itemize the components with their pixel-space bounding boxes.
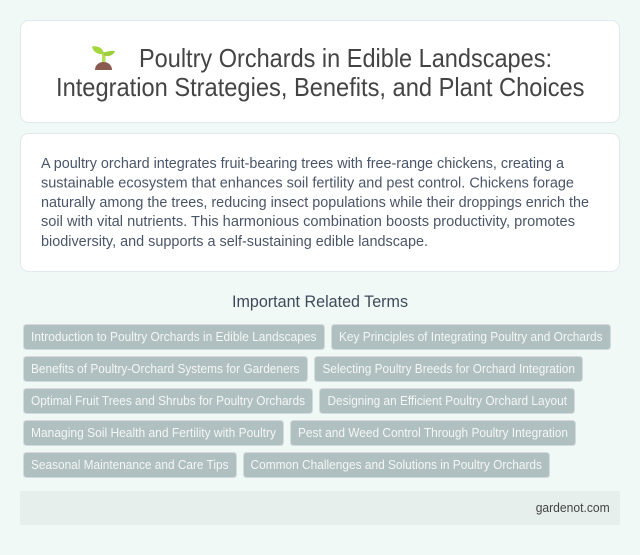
chip: pest control: [290, 420, 576, 446]
chip: selecting breeds: [314, 356, 582, 382]
footer: [20, 491, 620, 525]
chip: seasonal: [24, 452, 236, 478]
description text: soil with vital nutrients. This harmonious combination boosts productivity, promotes: [41, 213, 575, 230]
chip: challenges: Common Challenges and Solutions in Poultry Orchards: [250, 457, 542, 472]
description text: sustainable ecosystem that enhances soil fertility and pest control. Chickens forage: [41, 174, 574, 192]
chip: introduction: Introduction to Poultry Orchards in Edible Landscapes: [31, 329, 317, 344]
description text: biodiversity, and supports a self-sustaining edible landscape.: [41, 233, 428, 250]
chip: soil health: [24, 420, 284, 446]
panel: term chips: [24, 324, 610, 478]
chip: introduction: [24, 324, 324, 350]
chip: fruit trees: [24, 388, 312, 414]
chip: pest control: Pest and Weed Control Through Poultry Integration: [298, 425, 568, 440]
description text: [41, 155, 589, 250]
title: Integration Strategies, Benefits, and Plant Choices: [56, 72, 584, 102]
chip: fruit trees: Optimal Fruit Trees and Shrubs for Poultry Orchards: [31, 393, 305, 408]
chip: key principles: Key Principles of Integrating Poultry and Orchards: [339, 329, 603, 344]
chip: benefits: Benefits of Poultry-Orchard Systems for Gardeners: [31, 361, 300, 376]
panel: description card: [20, 134, 620, 272]
chip: layout: [320, 388, 574, 414]
chip: challenges: [244, 452, 550, 478]
title: [56, 43, 584, 102]
chip: layout: Designing an Efficient Poultry Orchard Layout: [328, 393, 567, 408]
description text: A poultry orchard integrates fruit-bearing trees with free-range chickens, creating a: [41, 155, 565, 172]
footer domain: gardenot.com: [536, 500, 610, 515]
panel: title card: [20, 20, 620, 122]
chip: seasonal: Seasonal Maintenance and Care Tips: [31, 457, 229, 472]
heading: important related terms: Important Related Terms: [232, 293, 408, 311]
title: Poultry Orchards in Edible Landscapes:: [139, 43, 552, 73]
chip: selecting breeds: Selecting Poultry Breeds for Orchard Integration: [322, 361, 575, 376]
chip: benefits: [24, 356, 308, 382]
icon: seedling: [92, 46, 115, 70]
chip: key principles: [332, 324, 610, 350]
description text: naturally among the trees, reducing insect populations while their droppings enrich the: [41, 194, 589, 211]
chip: soil health: Managing Soil Health and Fertility with Poultry: [31, 425, 276, 440]
